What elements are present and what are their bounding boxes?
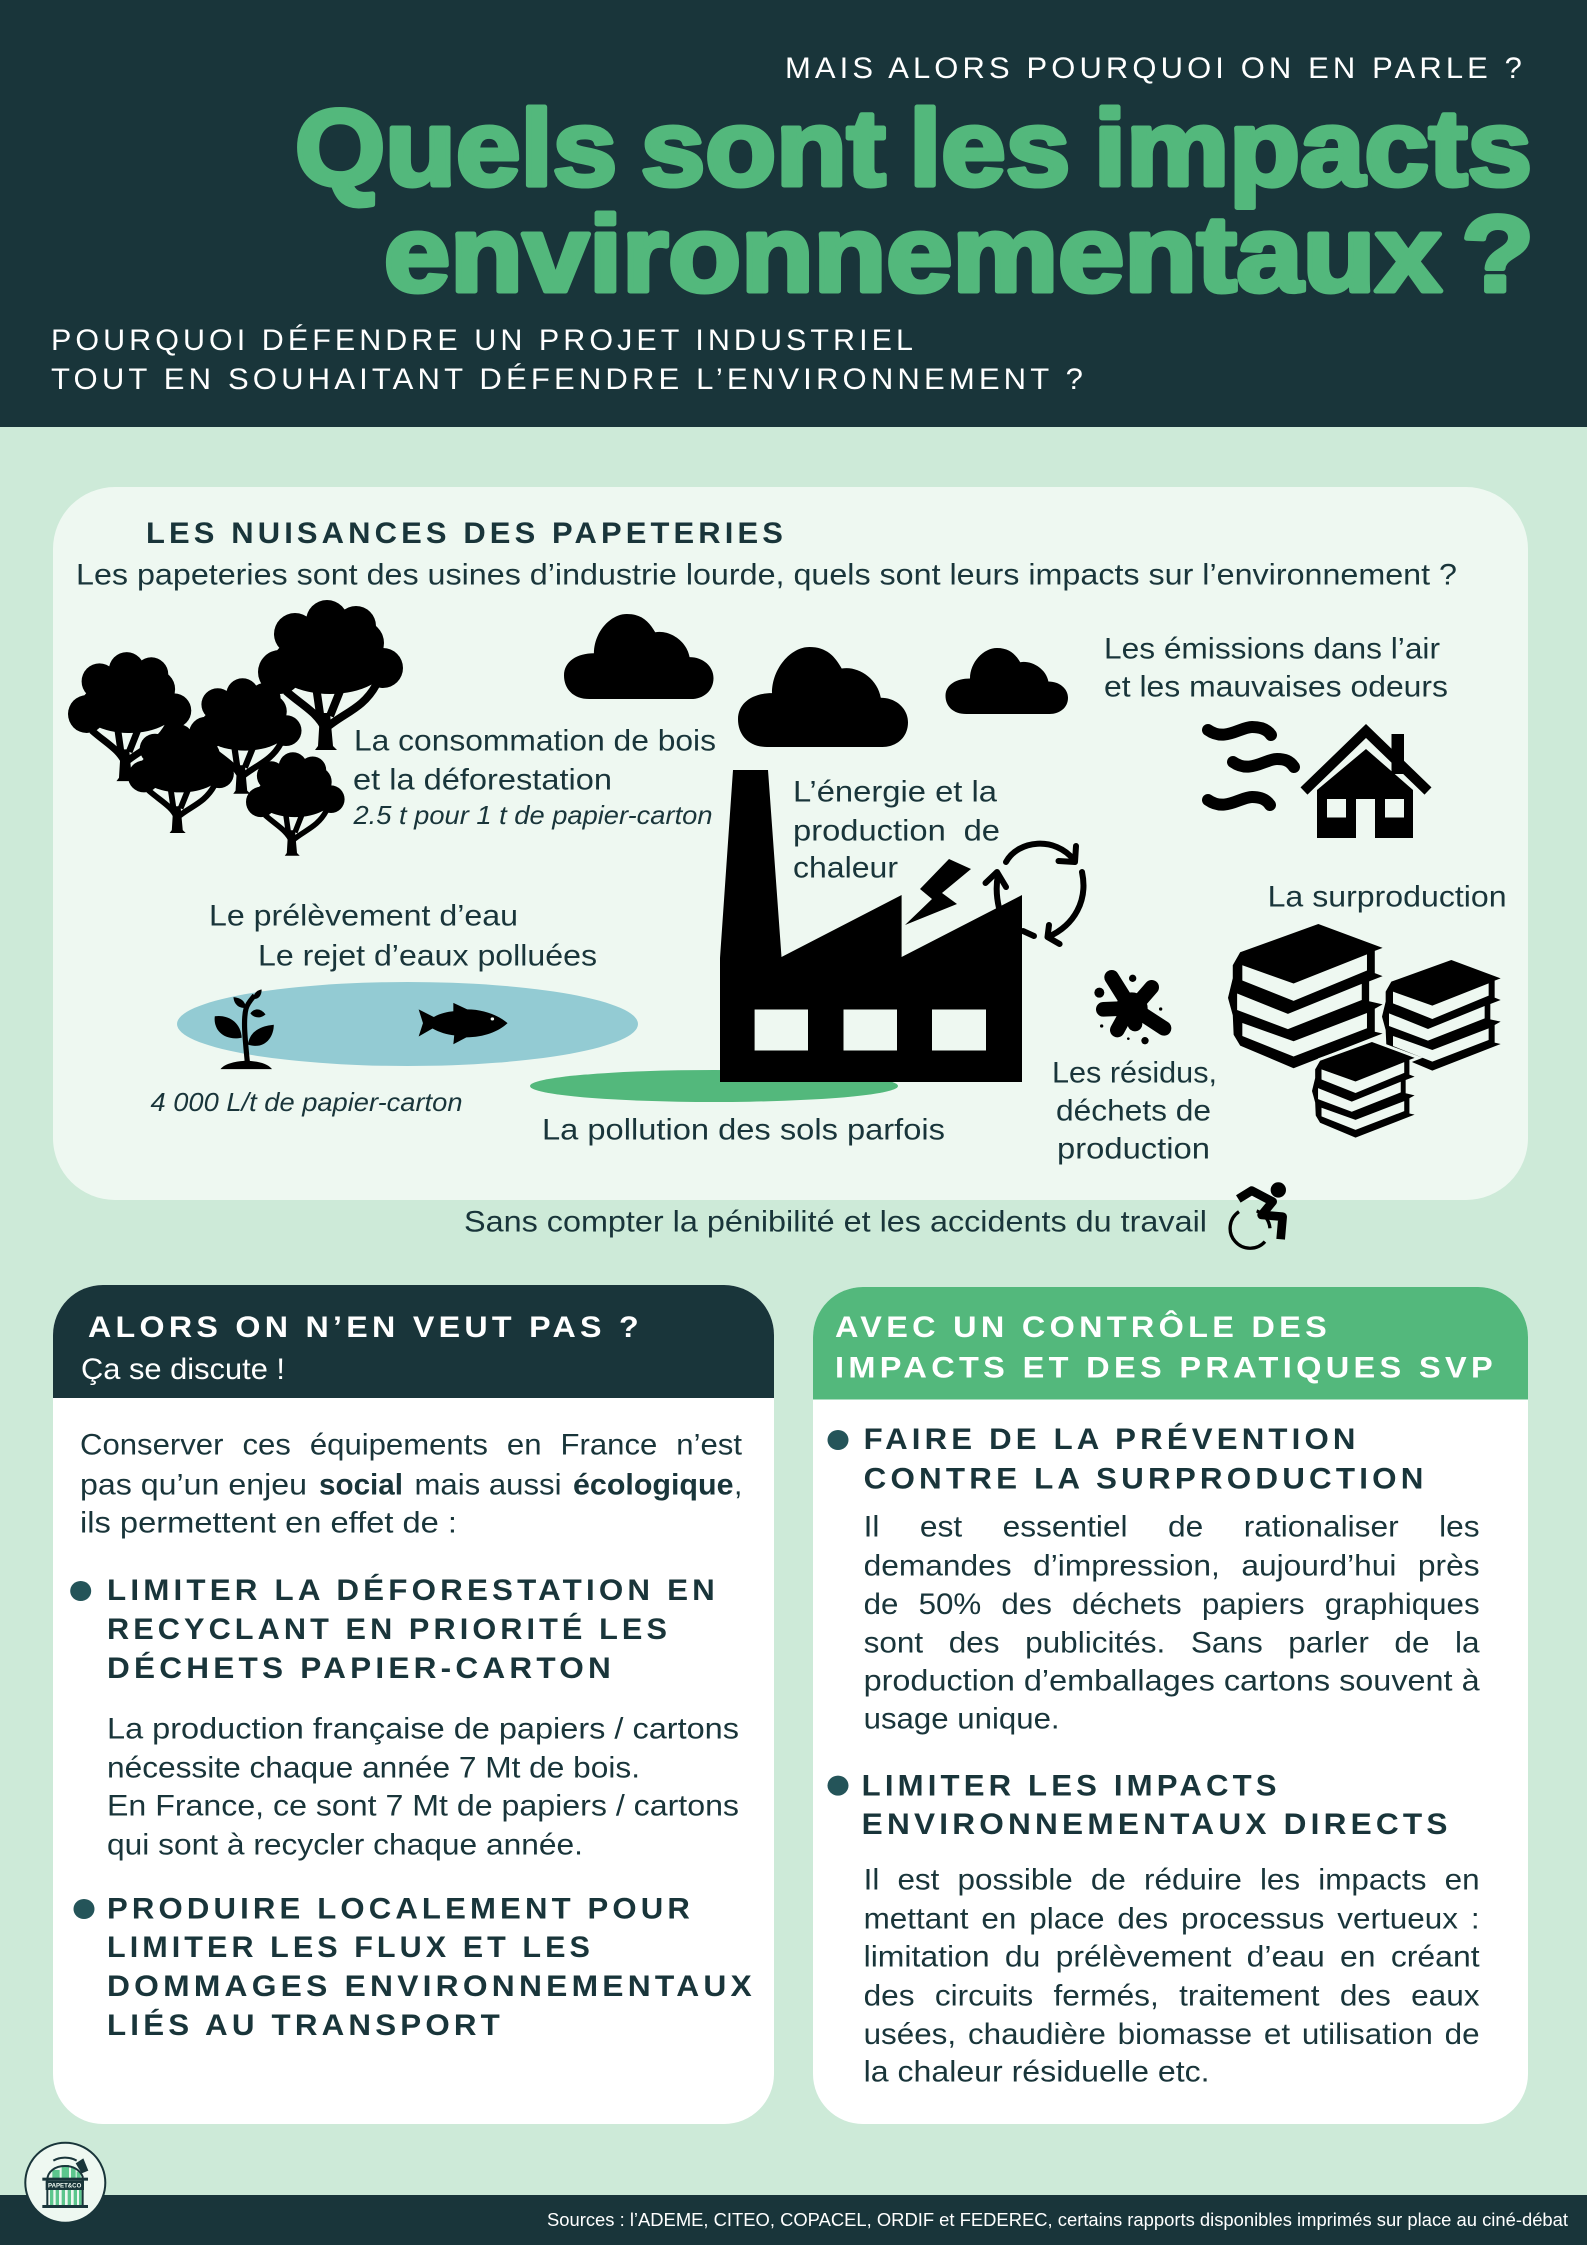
icon: factory — [720, 770, 1022, 1082]
icon: splat — [1094, 975, 1164, 1044]
icon: house — [1304, 731, 1428, 838]
text: energie: chaleur — [793, 851, 898, 884]
icon: cloud right — [946, 648, 1068, 714]
panel: alors on n'en veut pas — [53, 1285, 774, 2124]
text: rationaliser: usage unique. — [864, 1702, 1060, 1735]
header band — [0, 0, 1587, 427]
icon: cycle arrows — [986, 844, 1083, 944]
text: residus — [1052, 1056, 1217, 1165]
left intro text: mais aussi — [414, 1468, 562, 1501]
bullet 3 — [828, 1430, 848, 1450]
panel intro: Les papeteries sont des usines d’industrie lourde, quels sont leurs impacts sur l’environnement ? — [76, 558, 1457, 591]
text: rationaliser: sont des publicités. Sans parler de la — [864, 1626, 1480, 1659]
panel: avec un controle — [813, 1287, 1528, 2124]
soil pollution ellipse — [530, 1070, 898, 1102]
text: production francaise — [107, 1712, 739, 1861]
icon: book stacks — [1228, 924, 1501, 1138]
text: eau: Le prélèvement d’eau — [209, 899, 518, 932]
left intro text: Conserver ces équipements en France n’est — [80, 1428, 743, 1461]
icon: cloud left — [564, 614, 714, 699]
text: bois: et la déforestation — [353, 763, 612, 796]
heading: limiter la deforestation: RECYCLANT EN PRIORITÉ LES — [107, 1612, 671, 1646]
title — [295, 87, 1534, 314]
heading: prevention: FAIRE DE LA PRÉVENTION — [864, 1422, 1360, 1456]
heading: produire localement — [107, 1892, 756, 2042]
heading: produire localement: DOMMAGES ENVIRONNEMENTAUX — [107, 1970, 756, 2003]
heading: prevention — [864, 1422, 1428, 1495]
text: rationaliser: de 50% des déchets papiers graphiques — [864, 1588, 1480, 1621]
heading: produire localement: LIÉS AU TRANSPORT — [107, 2008, 504, 2042]
text: energie — [793, 775, 1000, 884]
heading: limiter la deforestation — [107, 1573, 719, 1685]
text: residus: déchets de — [1056, 1094, 1211, 1127]
subtitle: TOUT EN SOUHAITANT DÉFENDRE L’ENVIRONNEMENT ? — [51, 363, 1087, 396]
text: production francaise: La production française de papiers / cartons — [107, 1712, 739, 1745]
text: processus vertueux: des circuits fermés, traitement des eaux — [864, 1979, 1480, 2012]
left intro text: écologique — [573, 1468, 734, 1501]
text: processus vertueux: limitation du prélèvement d’eau en créant — [864, 1940, 1480, 1973]
bullet 2 — [74, 1899, 94, 1919]
heading: limiter la deforestation: DÉCHETS PAPIER-CARTON — [107, 1651, 615, 1685]
text: rationaliser: production d’emballages cartons souvent à — [864, 1664, 1480, 1697]
panel: nuisances — [53, 487, 1528, 1200]
text: production francaise: qui sont à recycler chaque année. — [107, 1828, 583, 1861]
left intro text: , — [734, 1468, 742, 1501]
icon: fish — [419, 1003, 508, 1044]
text: energie: production de — [793, 814, 1000, 847]
text: energie: L’énergie et la — [793, 775, 997, 808]
heading: prevention: CONTRE LA SURPRODUCTION — [864, 1462, 1428, 1495]
text: residus: Les résidus, — [1052, 1056, 1217, 1089]
text: emissions: Les émissions dans l’air — [1104, 632, 1440, 665]
logo — [25, 2143, 105, 2223]
bullet 1 — [70, 1581, 91, 1601]
text: sols: La pollution des sols parfois — [542, 1113, 945, 1146]
icon: lightning bolt — [905, 859, 971, 925]
text: eau — [209, 899, 597, 972]
heading: produire localement: PRODUIRE LOCALEMENT POUR — [107, 1892, 694, 1926]
heading: limiter les impacts: ENVIRONNEMENTAUX DIRECTS — [862, 1808, 1452, 1841]
left intro text: pas qu’un enjeu — [80, 1468, 307, 1501]
text: rationaliser: demandes d’impression, aujourd’hui près — [864, 1549, 1480, 1582]
icon: odour waves — [1208, 727, 1294, 805]
kicker: MAIS ALORS POURQUOI ON EN PARLE ? — [785, 52, 1526, 85]
left panel header: ALORS ON N’EN VEUT PAS ? — [88, 1311, 643, 1344]
subtitle: POURQUOI DÉFENDRE UN PROJET INDUSTRIEL — [51, 324, 917, 357]
icon: cloud middle — [738, 647, 908, 747]
text: penibilite: Sans compter la pénibilité et les accidents du travail — [464, 1205, 1207, 1238]
text: processus vertueux: usées, chaudière biomasse et utilisation de — [864, 2018, 1480, 2051]
subtitle — [51, 324, 1087, 396]
text: production francaise: En France, ce sont 7 Mt de papiers / cartons — [107, 1789, 739, 1822]
panel heading: LES NUISANCES DES PAPETERIES — [146, 517, 787, 550]
text: rationaliser: Il est essentiel de rationaliser les — [864, 1510, 1480, 1543]
text: production francaise: nécessite chaque année 7 Mt de bois. — [107, 1751, 640, 1784]
text: emissions — [1104, 632, 1448, 703]
text: eau: Le rejet d’eaux polluées — [258, 939, 597, 972]
text: processus vertueux: mettant en place des processus vertueux : — [864, 1903, 1480, 1936]
right panel header: AVEC UN CONTRÔLE DES — [835, 1310, 1331, 1344]
text: residus: production — [1057, 1132, 1210, 1165]
footer band — [0, 2195, 1587, 2245]
left panel header: Ça se discute ! — [81, 1353, 285, 1386]
heading: limiter les impacts — [862, 1770, 1452, 1841]
heading: limiter la deforestation: LIMITER LA DÉFORESTATION EN — [107, 1573, 719, 1607]
left intro text — [80, 1428, 743, 1539]
title: environnementaux ? — [384, 193, 1534, 314]
left intro text: ils permettent en effet de : — [80, 1506, 457, 1539]
water pond — [177, 982, 638, 1066]
heading: produire localement: LIMITER LES FLUX ET LES — [107, 1931, 594, 1964]
icon: wheelchair — [1230, 1182, 1286, 1248]
heading: limiter les impacts: LIMITER LES IMPACTS — [862, 1770, 1281, 1803]
left panel header — [53, 1285, 774, 1398]
text: bois: 2.5 t pour 1 t de papier-carton — [352, 800, 712, 830]
title: Quels sont les impacts — [295, 87, 1532, 208]
text: rationaliser — [864, 1510, 1480, 1735]
left intro text: social — [319, 1468, 403, 1501]
bullet 4 — [828, 1776, 848, 1796]
logo: PAPET&CO — [48, 2183, 81, 2190]
right panel header: IMPACTS ET DES PRATIQUES SVP — [835, 1352, 1497, 1385]
text: processus vertueux — [864, 1864, 1480, 2088]
text: surproduction: La surproduction — [1268, 880, 1507, 913]
text: processus vertueux: la chaleur résiduelle etc. — [864, 2055, 1210, 2088]
sources: Sources : l’ADEME, CITEO, COPACEL, ORDIF et FEDEREC, certains rapports disponibles imprimés sur place au ciné-débat — [547, 2209, 1568, 2230]
text: bois — [352, 724, 716, 830]
text: 4000 L/t: 4 000 L/t de papier-carton — [150, 1087, 462, 1117]
text: emissions: et les mauvaises odeurs — [1104, 670, 1448, 703]
right panel header — [813, 1287, 1528, 1400]
icon: plant — [215, 989, 274, 1069]
text: bois: La consommation de bois — [354, 724, 716, 757]
icon: trees — [68, 600, 403, 856]
text: processus vertueux: Il est possible de réduire les impacts en — [864, 1864, 1480, 1897]
